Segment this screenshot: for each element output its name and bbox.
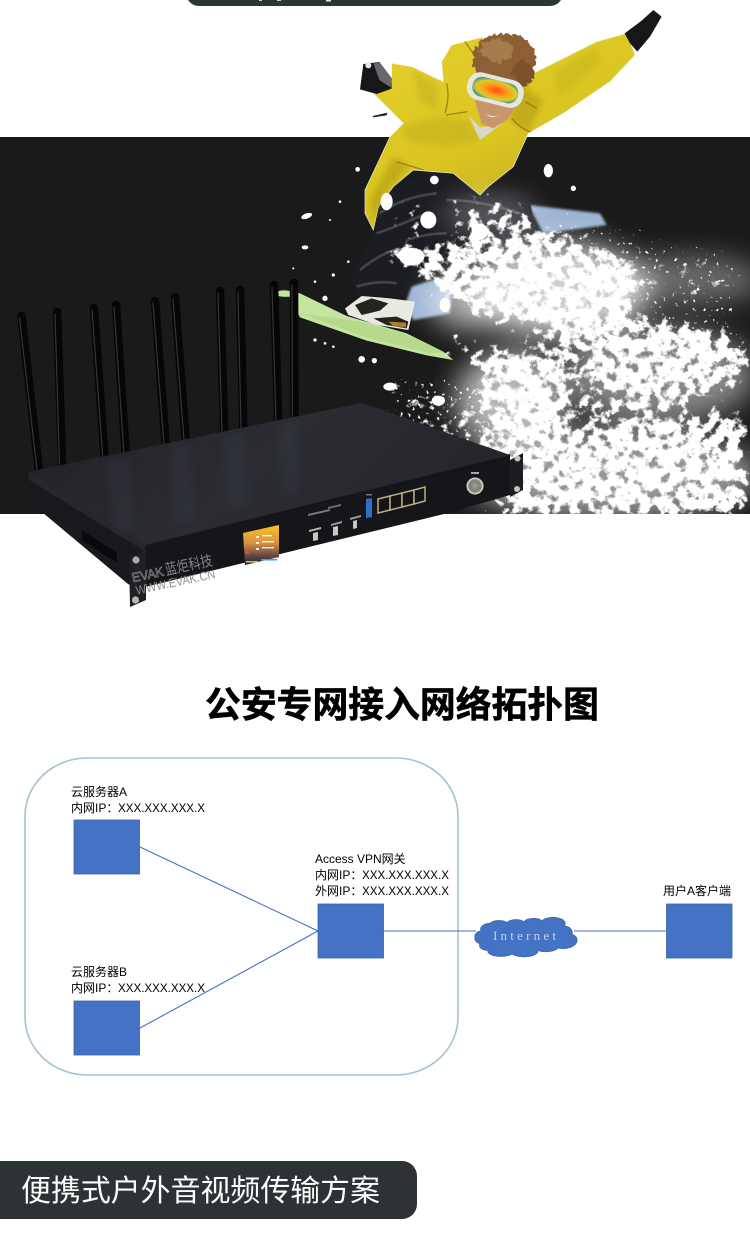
cloud server A [71, 784, 205, 874]
snow-lit blue patches behind rider [405, 205, 607, 320]
top dark banner (cropped heading bar) [188, 0, 561, 6]
left glove [360, 62, 392, 117]
Access VPN gateway: 外网IP： [315, 884, 362, 898]
router front face [145, 454, 510, 587]
bottom section heading bar: 便携式户外音视频传输方案 [21, 1175, 380, 1208]
cloud server A: 云服务器A [71, 784, 127, 799]
user A client [663, 883, 732, 958]
status screen [243, 525, 279, 565]
face [475, 100, 517, 128]
goggles [464, 70, 527, 111]
snow clumps [380, 190, 750, 520]
Access VPN gateway [315, 852, 449, 958]
USB port [366, 494, 372, 518]
cloud server B [71, 964, 205, 1055]
pants folds [357, 193, 520, 287]
metal power button [467, 472, 483, 494]
secure network boundary [25, 758, 458, 1075]
cloud server A: XXX.XXX.XXX.X [118, 802, 205, 815]
snowboarder [278, 10, 662, 360]
network topology diagram [25, 758, 732, 1075]
pants [350, 171, 535, 297]
watermark EVAK logo and URL: EVAK [131, 564, 165, 585]
title: 公安专网接入网络拓扑图 [205, 684, 599, 725]
snowboard [278, 290, 453, 360]
four ethernet ports [378, 487, 425, 513]
Access VPN gateway: XXX.XXX.XXX.X [362, 885, 449, 898]
cloud server B: 内网IP： [71, 981, 118, 995]
connection lines [140, 847, 666, 1028]
jacket [365, 33, 635, 230]
Access VPN gateway: 内网IP： [315, 868, 362, 882]
right glove [625, 10, 662, 52]
boot and binding [345, 296, 415, 330]
antennas [20, 283, 294, 480]
antenna reflections on top plate [105, 420, 300, 535]
bottom section heading bar [0, 1161, 417, 1219]
hair [472, 33, 536, 86]
SIM slots with labels [308, 504, 361, 541]
right rack ear [510, 453, 523, 497]
user A client: 用户A客户端 [663, 883, 731, 898]
Access VPN gateway: XXX.XXX.XXX.X [362, 869, 449, 882]
cloud server B: XXX.XXX.XXX.X [118, 982, 205, 995]
left rack ear [129, 550, 146, 607]
cloud server B: 云服务器B [71, 964, 127, 979]
router device [28, 403, 523, 607]
snow mist [428, 197, 750, 520]
Internet cloud [475, 917, 577, 957]
watermark EVAK logo and URL: WWW.EVAK.CN [134, 567, 217, 598]
jacket folds and seams [397, 42, 537, 170]
watermark EVAK logo and URL [130, 552, 217, 598]
cloud server A: 内网IP： [71, 801, 118, 815]
Access VPN gateway: Access VPN网关 [315, 852, 406, 866]
side vent [82, 530, 117, 563]
router top plate [28, 403, 510, 545]
router left side [28, 471, 146, 592]
shirt collar [468, 115, 502, 140]
dark hero background [0, 137, 750, 514]
scattered snow flakes [292, 164, 576, 406]
jacket shading [370, 47, 600, 220]
Internet cloud: Internet [493, 928, 556, 943]
watermark EVAK logo and URL: 蓝炬科技 [164, 552, 214, 579]
snow burst [292, 164, 750, 520]
